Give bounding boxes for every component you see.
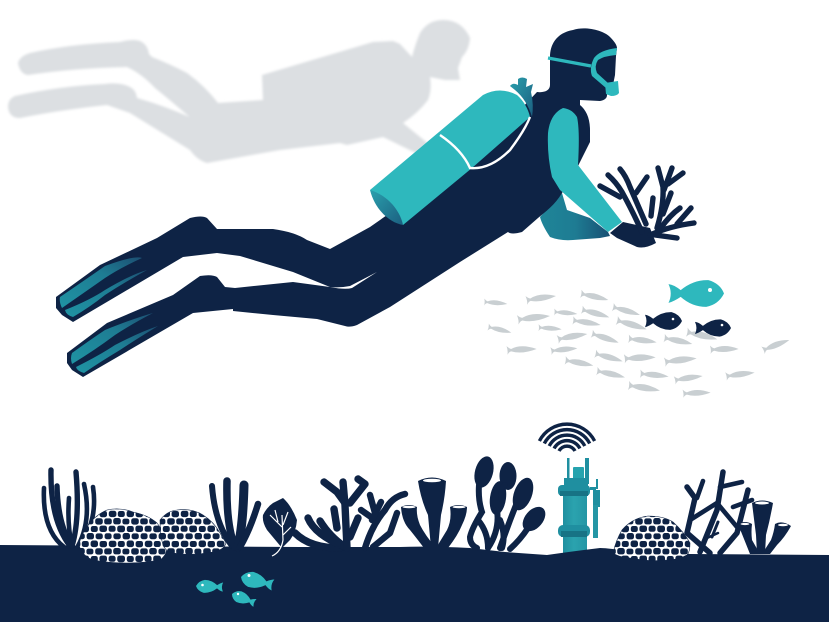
diver body and legs [56,28,617,377]
branching coral right [361,494,405,548]
scuba tank [370,90,530,225]
teal fish [668,280,724,307]
far arm with gradient [540,193,610,240]
fish school [484,290,791,398]
coral held in hand [600,168,694,238]
tube sponges centre [401,478,467,548]
brain coral middle [160,510,226,554]
brain coral left [79,509,167,563]
mask strap [548,58,591,66]
tank valve [510,78,533,117]
regulator [605,81,619,96]
sensor device [558,458,600,554]
diver [56,28,694,377]
dead branch coral [687,472,752,553]
seabed fish left [196,580,223,593]
tank end cap [370,190,403,225]
hand [610,222,656,248]
branching coral left [295,479,365,548]
mask frame [591,48,617,88]
wifi signal icon [539,424,595,451]
leaf coral [263,498,297,556]
brain coral right [613,516,690,561]
blurred diver shadow [8,20,470,163]
upper fin stripes [60,257,147,317]
navy fish right [695,319,731,337]
seabed fish top [239,569,275,593]
seaweed left [44,470,94,547]
seabed ground [0,545,829,622]
kelp cluster [470,454,550,549]
navy fish left [645,312,682,330]
gap between thighs [330,272,377,289]
tube sponges right [738,500,791,554]
seaweed middle [212,481,258,547]
near arm [548,108,622,232]
seabed fish bottom [230,588,257,609]
lower fin stripes [71,313,158,373]
tank harness line [440,117,530,168]
